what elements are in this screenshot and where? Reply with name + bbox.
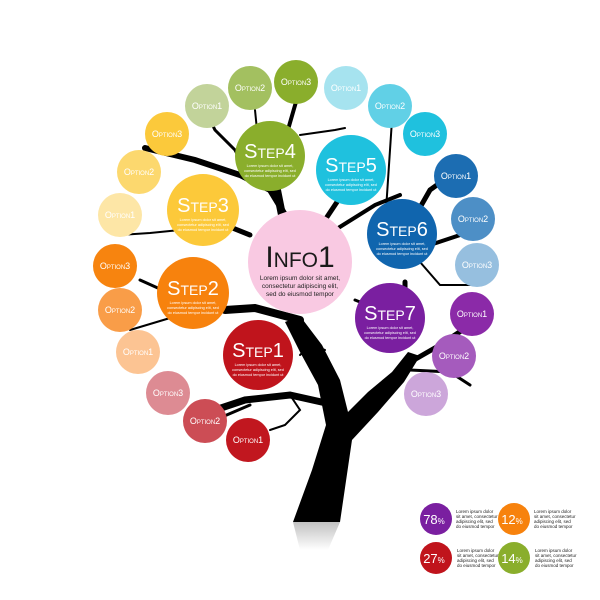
panel: step5 options: Option1 bbox=[331, 83, 361, 93]
panel: step6 options: Option3 bbox=[462, 260, 492, 270]
panel: step4 options bbox=[185, 60, 318, 128]
panel: step7 options bbox=[404, 292, 494, 416]
panel: step5 options bbox=[324, 66, 447, 156]
panel: steps: consectetur adipiscing elit, sed bbox=[364, 331, 416, 335]
panel: steps: Step1 bbox=[232, 340, 284, 362]
panel: info1: sed do eiusmod tempor bbox=[266, 291, 335, 298]
panel: step2 options bbox=[93, 244, 160, 374]
panel: steps: consectetur adipiscing elit, sed bbox=[167, 306, 219, 310]
legend: do eiusmod tempor bbox=[534, 524, 573, 529]
legend: sit amet, consectetur bbox=[535, 553, 577, 558]
panel: step3 options: Option1 bbox=[105, 210, 135, 220]
panel: steps: consectetur adipiscing elit, sed bbox=[376, 247, 428, 251]
panel: step6 options: Option1 bbox=[441, 171, 471, 181]
panel: steps: do eiusmod tempor incidunt ut bbox=[326, 188, 377, 192]
legend: 78% bbox=[423, 512, 445, 527]
legend: do eiusmod tempor bbox=[535, 563, 574, 568]
panel: steps: consectetur adipiscing elit, sed bbox=[325, 183, 377, 187]
panel: step5 options: Option3 bbox=[410, 129, 440, 139]
panel: steps: Step6 bbox=[376, 219, 428, 241]
panel: step3 options bbox=[98, 112, 189, 237]
panel: info1: Info1 bbox=[265, 241, 335, 274]
legend: sit amet, consectetur bbox=[456, 514, 498, 519]
panel: steps: Step3 bbox=[177, 195, 229, 217]
panel: info1: consectetur adipiscing elit, bbox=[262, 283, 338, 290]
panel: steps: Lorem ipsum dolor sit amet, bbox=[235, 363, 281, 367]
panel: step1 options: Option3 bbox=[153, 388, 183, 398]
panel: steps: Lorem ipsum dolor sit amet, bbox=[328, 178, 374, 182]
legend bbox=[420, 503, 577, 574]
legend: Lorem ipsum dolor bbox=[457, 548, 495, 553]
panel: step6 options: Option2 bbox=[458, 214, 488, 224]
legend: sit amet, consectetur bbox=[534, 514, 576, 519]
legend: sit amet, consectetur bbox=[457, 553, 499, 558]
legend: adipiscing elit, sed bbox=[535, 558, 572, 563]
panel: steps bbox=[157, 121, 437, 390]
panel: step6 options bbox=[434, 154, 499, 287]
legend: 27% bbox=[423, 551, 445, 566]
panel: steps: consectetur adipiscing elit, sed bbox=[177, 223, 229, 227]
legend: adipiscing elit, sed bbox=[534, 519, 571, 524]
panel: step3 options: Option3 bbox=[152, 129, 182, 139]
panel: steps: Lorem ipsum dolor sit amet, bbox=[180, 218, 226, 222]
legend: Lorem ipsum dolor bbox=[535, 548, 573, 553]
panel: steps: do eiusmod tempor incidunt ut bbox=[168, 311, 219, 315]
panel: step1 options: Option2 bbox=[190, 416, 220, 426]
panel: steps: Step4 bbox=[244, 141, 296, 163]
panel: steps: Lorem ipsum dolor sit amet, bbox=[379, 242, 425, 246]
panel: steps: Lorem ipsum dolor sit amet, bbox=[367, 326, 413, 330]
panel: steps: consectetur adipiscing elit, sed bbox=[232, 368, 284, 372]
panel: info1 bbox=[248, 210, 352, 314]
panel: step2 options: Option3 bbox=[100, 261, 130, 271]
panel: info1: Lorem ipsum dolor sit amet, bbox=[260, 275, 340, 282]
panel: steps: Step7 bbox=[364, 303, 416, 325]
panel: step4 options: Option2 bbox=[235, 83, 265, 93]
tree bbox=[120, 95, 480, 550]
panel: steps: do eiusmod tempor incidunt ut bbox=[178, 228, 229, 232]
panel: steps: do eiusmod tempor incidunt ut bbox=[233, 373, 284, 377]
panel: steps: do eiusmod tempor incidunt ut bbox=[377, 252, 428, 256]
panel: steps: Lorem ipsum dolor sit amet, bbox=[247, 164, 293, 168]
panel: step7 options: Option3 bbox=[411, 389, 441, 399]
legend: 12% bbox=[501, 512, 523, 527]
panel: step3 options: Option2 bbox=[124, 167, 154, 177]
legend: adipiscing elit, sed bbox=[457, 558, 494, 563]
panel: step4 options: Option1 bbox=[192, 101, 222, 111]
panel: step5 options: Option2 bbox=[375, 101, 405, 111]
legend: Lorem ipsum dolor bbox=[456, 509, 494, 514]
panel: steps: do eiusmod tempor incidunt ut bbox=[365, 336, 416, 340]
panel: step1 options: Option1 bbox=[233, 435, 263, 445]
panel: steps: do eiusmod tempor incidunt ut bbox=[245, 174, 296, 178]
panel: steps: Step2 bbox=[167, 278, 219, 300]
panel: step7 options: Option2 bbox=[439, 351, 469, 361]
panel: step4 options: Option3 bbox=[281, 77, 311, 87]
panel: steps: consectetur adipiscing elit, sed bbox=[244, 169, 296, 173]
panel: step7 options: Option1 bbox=[457, 309, 487, 319]
panel: steps: Lorem ipsum dolor sit amet, bbox=[170, 301, 216, 305]
legend: 14% bbox=[501, 551, 523, 566]
legend: do eiusmod tempor bbox=[457, 563, 496, 568]
legend: adipiscing elit, sed bbox=[456, 519, 493, 524]
panel: step2 options: Option1 bbox=[123, 347, 153, 357]
panel: steps: Step5 bbox=[325, 155, 377, 177]
panel: step2 options: Option2 bbox=[105, 305, 135, 315]
panel: step1 options bbox=[146, 371, 270, 462]
legend: do eiusmod tempor bbox=[456, 524, 495, 529]
legend: Lorem ipsum dolor bbox=[534, 509, 572, 514]
